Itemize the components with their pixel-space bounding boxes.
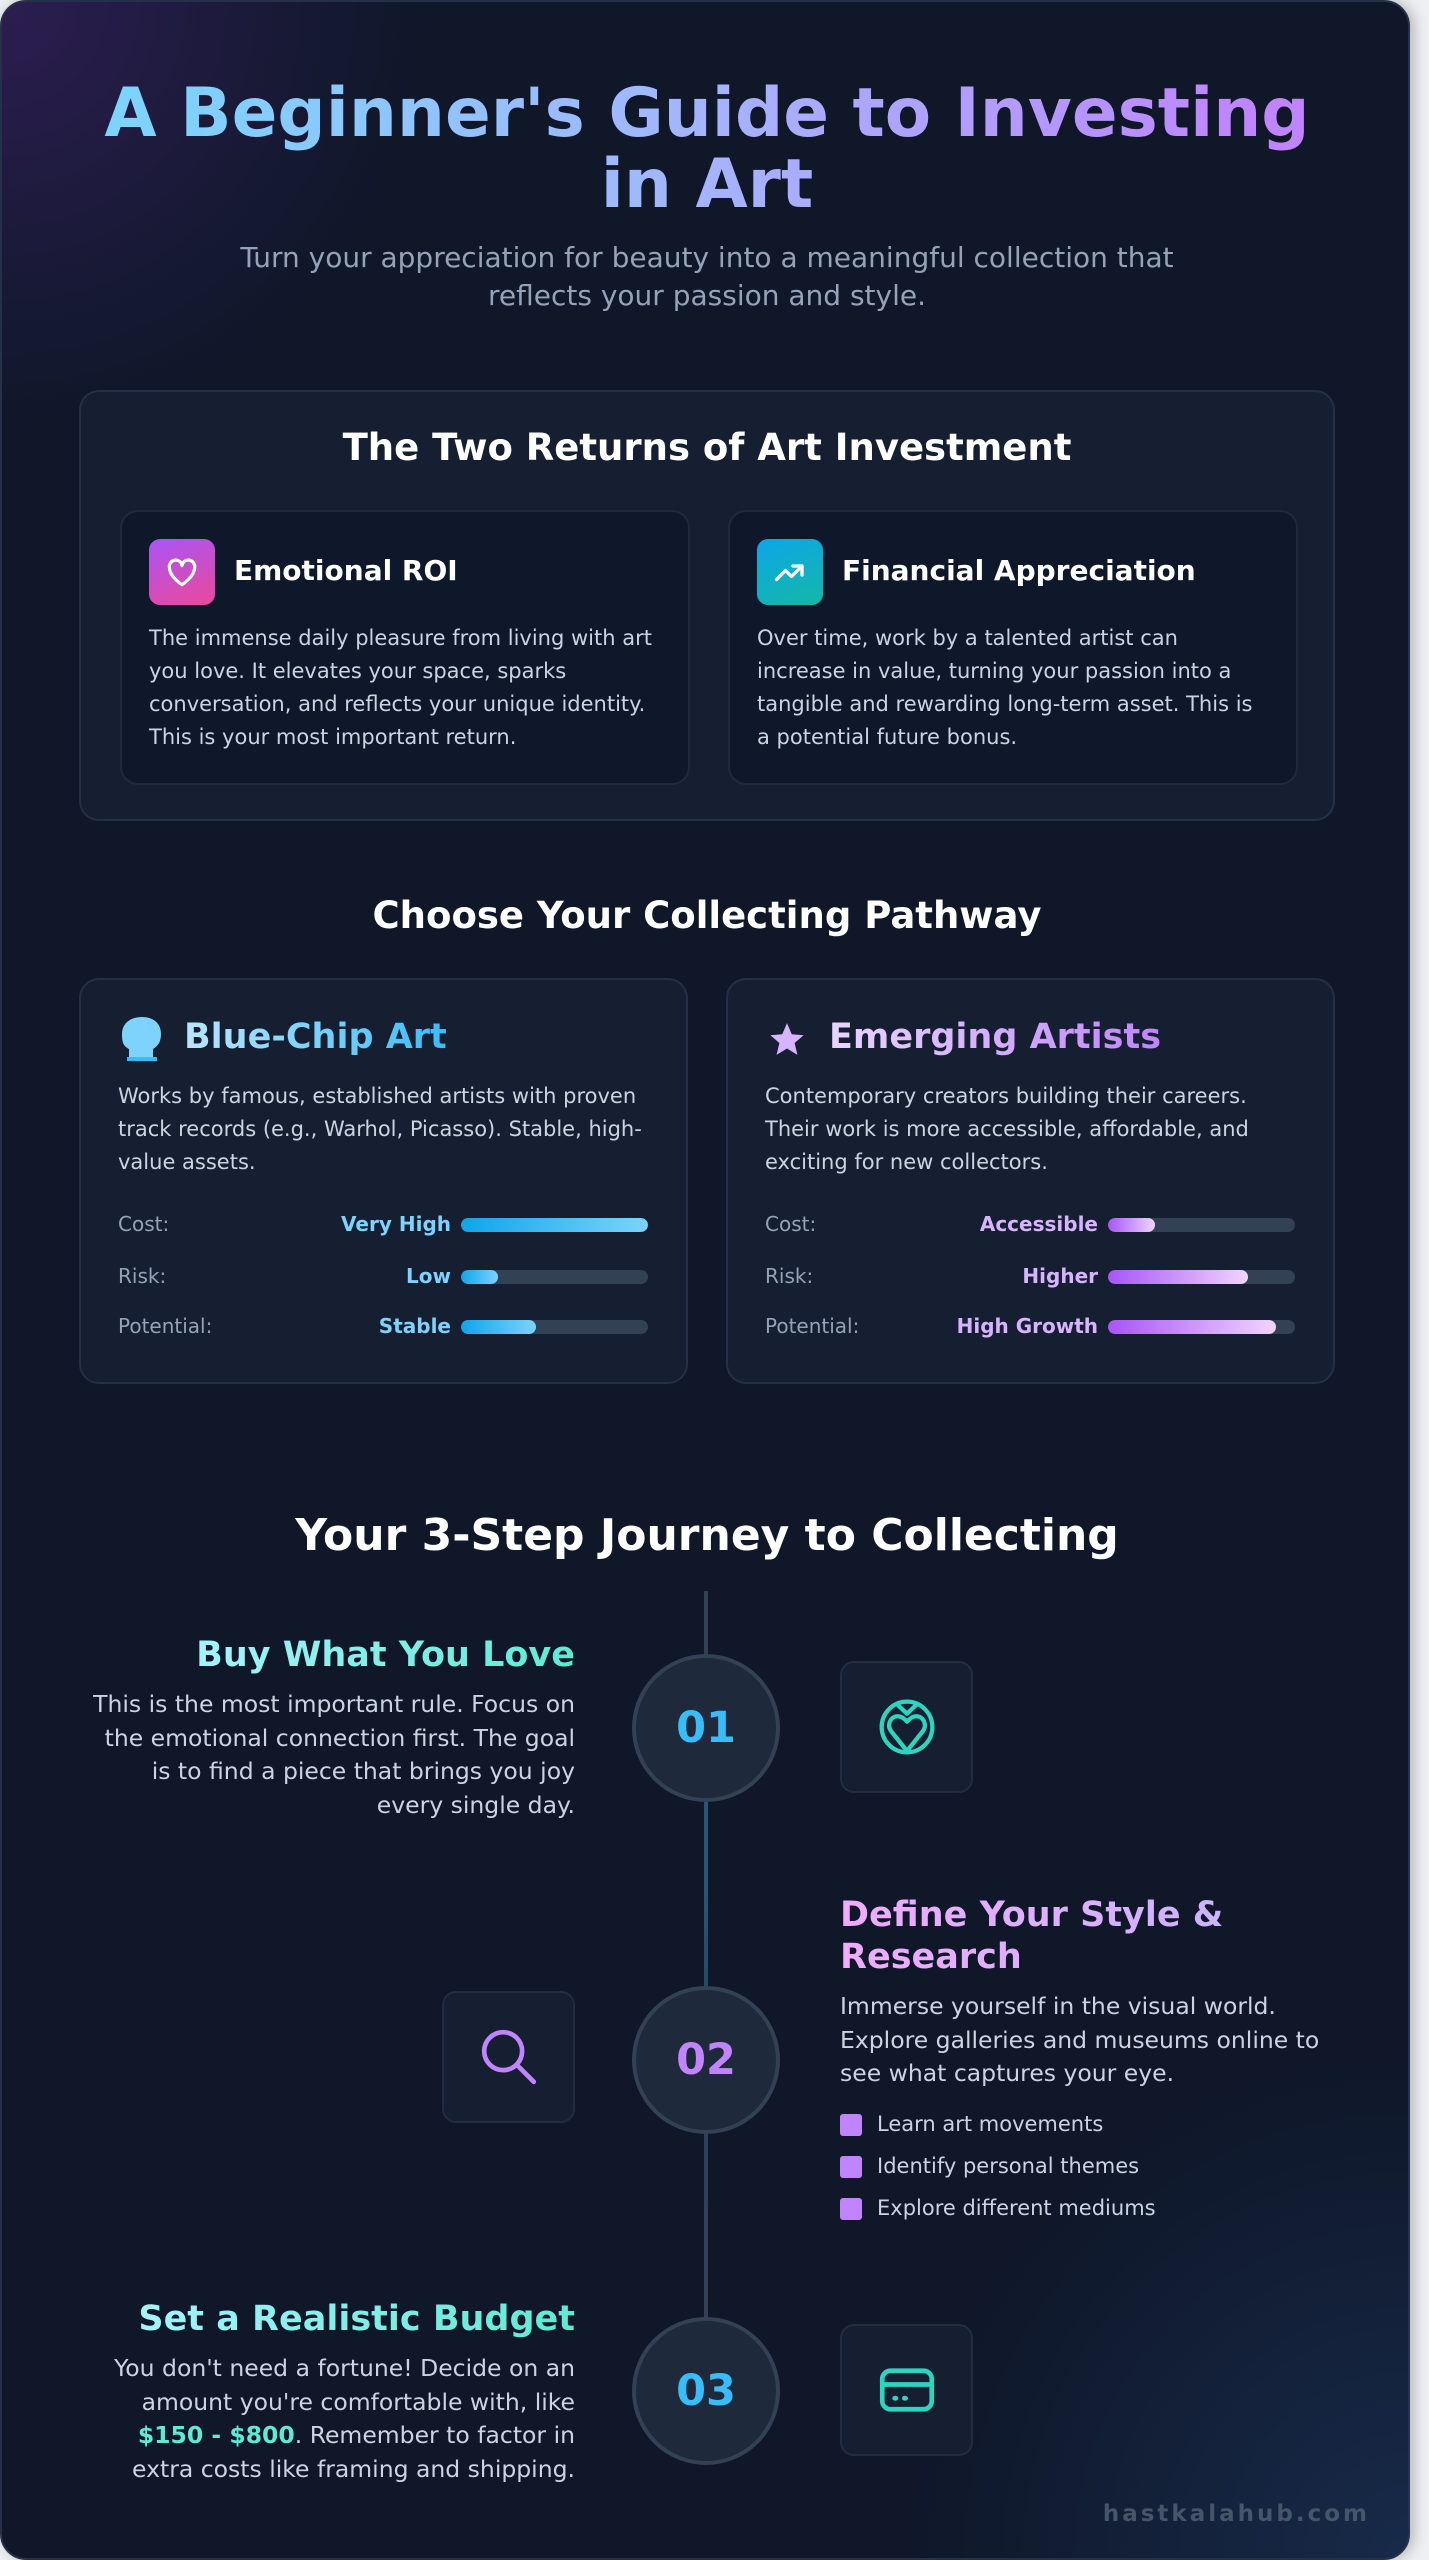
metrics: emerging: Risk: — [765, 1264, 813, 1288]
step 3 circle — [632, 2317, 780, 2465]
heading: pathway: Choose Your Collecting Pathway — [373, 894, 1041, 937]
metrics: blue-chip: Stable — [379, 1314, 451, 1338]
text: emerging desc: Contemporary creators building their careers. Their work is more accessible, affordable, and exciting for new collectors. — [765, 1084, 1249, 1174]
metrics: emerging: Cost: — [765, 1212, 816, 1236]
heading: two returns: The Two Returns of Art Investment — [343, 426, 1071, 469]
title: in Art — [601, 144, 813, 223]
step 2 content — [840, 1895, 1319, 2220]
bullet list — [840, 2112, 1156, 2220]
step 3 title: Set a Realistic Budget — [138, 2299, 575, 2339]
metrics: emerging — [765, 1212, 1295, 1338]
panel: blue-chip art — [79, 978, 688, 1384]
step 3 text: You don't need a fortune! Decide on an amount you're comfortable with, like $150 - $800. Remember to factor in extra costs like framing and shipping. — [114, 2354, 575, 2482]
step 1 text: This is the most important rule. Focus on the emotional connection first. The goal is to find a piece that brings you joy every single day. — [93, 1690, 575, 1818]
metrics: emerging: Higher — [1022, 1264, 1098, 1288]
icon: heart circle — [840, 1661, 973, 1793]
heading: emotional ROI: Emotional ROI — [234, 554, 458, 587]
icon: search — [442, 1991, 575, 2123]
icon: credit card — [840, 2324, 973, 2456]
heading: journey: Your 3-Step Journey to Collecting — [295, 1510, 1119, 1561]
panel: two returns — [79, 390, 1335, 821]
step 2 text: Immerse yourself in the visual world. Explore galleries and museums online to see what captures your eye. — [840, 1992, 1319, 2087]
icon: star — [770, 1023, 804, 1055]
step 3 circle: 03 — [676, 2366, 736, 2416]
metrics: blue-chip: Risk: — [118, 1264, 166, 1288]
heading: emerging: Emerging Artists — [829, 1017, 1161, 1057]
icon: heart — [149, 539, 215, 605]
metrics: blue-chip: Very High — [341, 1212, 451, 1236]
step 2 circle: 02 — [676, 2035, 736, 2085]
card: financial appreciation — [728, 510, 1298, 785]
title — [2, 77, 1412, 219]
text: emotional ROI: The immense daily pleasure from living with art you love. It elevates your space, sparks conversation, and reflects your unique identity. This is your most important return. — [149, 626, 652, 749]
metrics: blue-chip: Low — [406, 1264, 451, 1288]
metrics: blue-chip: Cost: — [118, 1212, 169, 1236]
card: emotional ROI — [120, 510, 690, 785]
title: A Beginner's Guide to Investing — [104, 73, 1310, 152]
metrics: blue-chip: Potential: — [118, 1314, 212, 1338]
timeline line — [704, 1591, 708, 2321]
icon: trending up — [757, 539, 823, 605]
icon: bust — [122, 1017, 161, 1061]
metrics: emerging: Accessible — [980, 1212, 1098, 1236]
footer: site: hastkalahub.com — [1103, 2501, 1370, 2527]
step 1 title: Buy What You Love — [196, 1635, 575, 1675]
step 1 circle — [632, 1654, 780, 1802]
step 2 title: Define Your Style & Research — [840, 1895, 1223, 1977]
bullet list: Identify personal themes — [877, 2154, 1139, 2178]
bullet list: Learn art movements — [877, 2112, 1103, 2136]
step 1 circle: 01 — [676, 1703, 736, 1753]
text: blue-chip desc: Works by famous, established artists with proven track records (e.g., Warhol, Picasso). Stable, high-value assets. — [118, 1084, 642, 1174]
step 1 — [93, 1635, 575, 1818]
metrics: emerging: High Growth — [957, 1314, 1098, 1338]
metrics: blue-chip — [118, 1212, 648, 1338]
heading: financial appreciation: Financial Appreciation — [842, 554, 1196, 587]
heading: blue-chip: Blue-Chip Art — [184, 1017, 447, 1057]
subtitle: Turn your appreciation for beauty into a meaningful collection that reflects your passion and style. — [240, 241, 1174, 312]
step 2 circle — [632, 1986, 780, 2134]
text: financial appreciation: Over time, work by a talented artist can increase in value, turning your passion into a tangible and rewarding long-term asset. This is a potential future bonus. — [757, 626, 1252, 749]
panel: emerging artists — [726, 978, 1335, 1384]
step 3 — [114, 2299, 575, 2482]
bullet list: Explore different mediums — [877, 2196, 1156, 2220]
metrics: emerging: Potential: — [765, 1314, 859, 1338]
